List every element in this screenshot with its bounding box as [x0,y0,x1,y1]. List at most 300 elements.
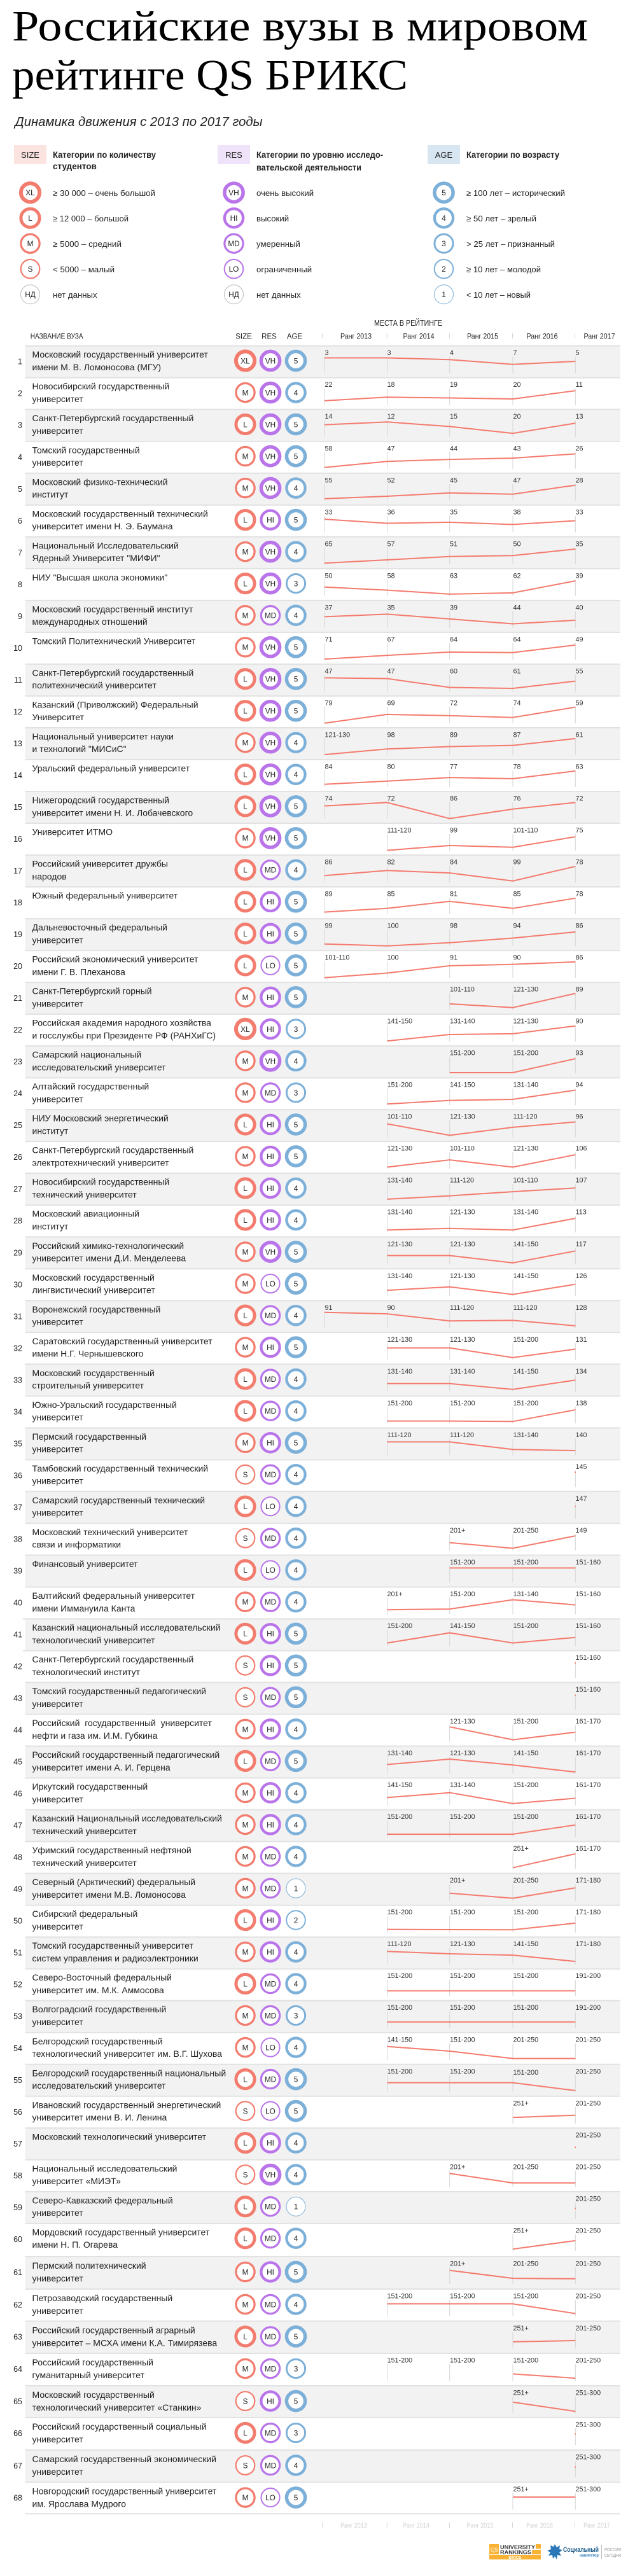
rank line: 84 [450,859,457,867]
rank line: 131-140 [513,1082,538,1089]
rank line: 99 [450,827,457,835]
name: электротехнический университет [32,1157,169,1167]
name [32,1145,193,1168]
rank line: 106 [575,1145,587,1153]
rank line: 72 [450,699,457,707]
logo: QS University Rankings BRICS: BRICS [508,2556,522,2560]
badges: XL [241,1025,250,1034]
rank line: 96 [575,1113,583,1121]
name: Балтийский федеральный университет [32,1591,195,1601]
badges [236,1911,305,1930]
legend: size: ≥ 12 000 – большой [53,214,129,223]
badges: MD [265,1884,276,1893]
rank line: 251+ [513,2227,529,2234]
logo: QS University Rankings BRICS: QS [491,2547,498,2553]
row 21: 21 [13,994,22,1003]
rank line: 145 [575,1463,587,1471]
row 63: 63 [13,2332,22,2341]
row 64: 64 [13,2365,22,2374]
badges [236,702,305,720]
badges: 5 [294,2397,298,2405]
legend: research [218,145,383,304]
name [32,1177,169,1200]
row 29: 29 [13,1248,22,1257]
badges: 3 [294,2364,298,2373]
badges: 4 [294,1216,298,1225]
badges: HI [267,1216,274,1225]
badges: HI [267,2267,274,2276]
badges: 5 [294,898,298,907]
name [32,1909,137,1932]
rank line: 151-200 [513,1909,538,1916]
rank line: 69 [387,699,395,707]
rank line: 58 [387,572,395,580]
rank line [450,1718,601,1742]
rank line [387,1209,587,1232]
rank line [450,2260,601,2284]
row 30: 30 [13,1280,22,1289]
rank line: 151-160 [575,1622,601,1630]
badges: L [243,515,248,524]
badges: S [243,1661,248,1670]
badges [236,1847,305,1865]
badges: L [243,1916,248,1925]
name: Волгоградский государственный [32,2004,166,2014]
rank line: 151-200 [450,2293,475,2301]
rank line: 151-200 [513,1336,538,1344]
name: Московский авиационный [32,1209,139,1219]
rank line: 141-150 [387,2036,412,2043]
rank line [324,445,583,469]
rank line: 151-200 [450,2357,475,2364]
badges: LO [265,2043,276,2052]
badges: M [242,2043,248,2052]
row 30 [13,1268,620,1296]
badges: VH [265,675,276,684]
badges: 5 [294,2267,298,2276]
badges: S [243,2461,248,2470]
name: имени М. В. Ломоносова (МГУ) [32,362,161,372]
name: Российский государственный социальный [32,2421,207,2432]
rank line: 100 [387,922,399,930]
rank line: 47 [324,667,333,675]
rank line: 90 [387,1304,395,1312]
rank line: 107 [575,1177,587,1185]
rank line: 201-250 [575,2163,601,2171]
rank line: 151-160 [575,1591,601,1598]
badges: VH [265,1248,276,1257]
rank line: 151-200 [387,1622,412,1630]
name: исследовательский университет [32,2080,166,2091]
title [12,2,588,99]
badges: L [243,1502,248,1511]
badges: VH [265,356,276,365]
table header: Ранг 2013 [340,333,372,340]
name: и госслужбы при Президенте РФ (РАНХиГС) [32,1030,216,1040]
rank line: 140 [575,1431,587,1439]
name: университет имени В. И. Ленина [32,2112,167,2122]
badges: M [242,1820,248,1829]
name [32,1495,205,1518]
name: Воронежский государственный [32,1304,160,1314]
rank line: 131-140 [513,1591,538,1598]
name [32,1718,212,1741]
rank line: 47 [387,445,395,452]
rank line: 39 [575,572,583,580]
name: связи и информатики [32,1540,121,1550]
row 39 [13,1555,620,1587]
row 35 [13,1427,620,1459]
rank line: 201-250 [575,2293,601,2301]
row 32: 32 [13,1344,22,1353]
rank line: 251-300 [575,2486,601,2493]
legend: age: 1 [442,290,446,299]
name: университет [32,1921,83,1932]
table header: SIZE [235,333,252,340]
row 42: 42 [13,1662,22,1671]
badges: M [242,2011,248,2020]
row 50 [13,1905,620,1933]
name: и технологий "МИСиС" [32,744,127,754]
row 59: 59 [13,2203,22,2212]
row 34 [13,1395,620,1423]
legend: age: > 25 лет – признанный [466,239,555,249]
row 5 [18,473,620,505]
rank line: 86 [324,859,333,867]
row 11: 11 [14,676,22,685]
rank line: 151-200 [513,1400,538,1407]
name: Мордовский государственный университет [32,2227,210,2237]
badges: 4 [294,770,298,779]
rank line: 151-200 [513,2293,538,2301]
badges [236,1656,305,1675]
badges: S [243,1693,248,1702]
badges: L [243,929,248,938]
rank line: 101-110 [450,986,475,994]
name [32,1241,186,1264]
badges [236,2392,305,2411]
rank line: 86 [575,954,583,962]
row 18 [13,886,620,914]
name: Казанский Национальный исследовательский [32,1813,222,1823]
rank line: 111-120 [450,1431,474,1439]
rank line: 201-250 [575,2099,601,2107]
name [32,413,193,436]
badges [236,765,305,784]
rank line [324,508,583,533]
row 42 [13,1650,620,1678]
name: Московский государственный [32,1368,155,1378]
rank line: 151-200 [450,1813,475,1821]
rank line: 171-180 [575,1909,601,1916]
row 61 [13,2256,620,2288]
rank line: 141-150 [387,1781,412,1789]
badges: M [242,1852,248,1861]
rank line: 121-130 [387,1336,412,1344]
badges [236,1592,305,1611]
badges: 5 [294,515,298,524]
badges [236,1942,305,1961]
rank line: 138 [575,1400,587,1407]
rank line: 201+ [450,2163,465,2171]
name: Белгородский государственный национальный [32,2068,226,2078]
name: университет [32,394,83,404]
rank line: 161-170 [575,1750,601,1757]
badges: MD [265,1598,276,1606]
badges: L [243,898,248,907]
name: Южный федеральный университет [32,891,178,901]
rank line: 151-200 [450,2068,475,2075]
rank line: 86 [450,795,457,803]
badges: 4 [294,2461,298,2470]
rank line: 87 [513,731,521,739]
rank line [387,1272,587,1296]
name [32,2357,153,2380]
badges: HI [267,1661,274,1670]
badges: HI [267,929,274,938]
row 41: 41 [13,1630,22,1639]
badges: M [242,388,248,397]
name [32,986,152,1008]
row 48: 48 [13,1853,22,1862]
row 14: 14 [13,771,22,780]
row 12: 12 [13,707,22,716]
badges: 4 [294,1566,298,1575]
name [32,2421,207,2444]
row 66: 66 [13,2429,22,2438]
row 14 [13,759,620,787]
rank line [575,1463,587,1487]
rank line: 141-150 [450,1622,475,1630]
row 40 [13,1587,620,1615]
name: Московский технологический университет [32,2131,207,2141]
row 7: 7 [18,548,22,557]
name [32,2036,222,2059]
badges: L [243,707,248,716]
row 21 [13,982,620,1013]
logo: Россия сегодня [602,2545,621,2559]
badges: 5 [294,707,298,716]
name [32,508,208,531]
row 58 [13,2159,620,2187]
row 46: 46 [13,1790,22,1799]
badges: M [242,2267,248,2276]
badges: 4 [294,388,298,397]
rank line: 128 [575,1304,587,1312]
badges: M [242,1089,248,1097]
rank line: 191-200 [575,2004,601,2012]
name [32,1813,222,1836]
row 15 [13,791,620,823]
name: НИУ Московский энергетический [32,1113,169,1124]
row 16 [13,823,620,851]
badges: HI [267,1788,274,1797]
rank line: 101-110 [450,1145,475,1153]
rank line: 35 [575,540,583,548]
name [32,381,169,404]
name: университет [32,2017,83,2027]
row 35: 35 [13,1439,22,1448]
badges: 5 [294,1661,298,1670]
badges: M [242,1725,248,1734]
name: Национальный университет науки [32,731,174,741]
rank line: 141-150 [450,1082,475,1089]
name: Московский государственный институт [32,604,193,614]
badges: MD [265,1693,276,1702]
badges [236,2262,305,2281]
badges: M [242,611,248,620]
rank line: 111-120 [387,1431,412,1439]
name: Иркутский государственный [32,1781,148,1792]
row 29 [13,1236,620,1268]
row 68: 68 [13,2494,22,2503]
rank line: 121-130 [387,1145,412,1153]
badges [236,2327,305,2346]
badges [236,1688,305,1707]
rank line: 131-140 [387,1272,412,1280]
badges: HI [267,1725,274,1734]
rank line: 111-120 [513,1304,538,1312]
name [32,1750,220,1772]
rank line: 35 [450,508,457,516]
badges: 5 [294,1438,298,1447]
badges: 4 [294,2171,298,2180]
badges: MD [265,2332,276,2341]
rank line: 151-200 [387,1909,412,1916]
name [32,1972,172,1995]
row 38 [13,1522,620,1550]
badges: L [243,675,248,684]
legend: research: RES [225,150,242,160]
name: университет [32,998,83,1008]
rank line: 131-140 [387,1368,412,1375]
name [32,1845,192,1868]
row 10 [13,632,620,660]
rank line: 47 [513,477,521,484]
name: технологический институт [32,1667,141,1677]
name: Российский государственный университет [32,1718,212,1728]
badges: L [243,770,248,779]
badges: S [243,2397,248,2405]
badges [236,1370,305,1388]
legend: age: ≥ 10 лет – молодой [466,265,541,274]
badges: 4 [294,866,298,875]
badges [236,1433,305,1452]
name: университет [32,1412,83,1423]
badges: HI [267,1438,274,1447]
rank line: 151-200 [387,2357,412,2364]
row 26 [13,1141,620,1169]
rank line [575,2421,601,2445]
row 52: 52 [13,1981,22,1989]
name: Пермский политехнический [32,2260,146,2271]
rank line [513,2227,601,2251]
rank line: 201-250 [575,2325,601,2332]
rank line [387,1591,601,1615]
rank line: 121-130 [387,1241,412,1248]
rank line [575,2131,601,2147]
rank line: 26 [575,445,583,452]
rank line: 89 [575,986,583,994]
badges: M [242,1598,248,1606]
rank line: 201+ [450,2260,465,2267]
badges: L [243,1629,248,1638]
badges [236,383,305,402]
legend: size [14,145,156,304]
rank line [387,1622,601,1647]
row 7 [18,536,620,568]
rank line: 201-250 [575,2227,601,2234]
name: университет [32,1794,83,1804]
name: технологический университет им. В.Г. Шухова [32,2049,222,2059]
rank line: 151-160 [575,1654,601,1662]
name [32,1018,216,1040]
row 46 [13,1778,620,1806]
rank line: 74 [324,795,333,803]
badges: 4 [294,1820,298,1829]
rank line: 90 [575,1018,583,1026]
rank line: 44 [450,445,457,452]
name: Национальный исследовательский [32,2163,177,2173]
badges: VH [265,802,276,811]
badges: 4 [294,2300,298,2309]
name: Университет ИТМО [32,827,113,837]
name: университет имени М.В. Ломоносова [32,1890,186,1900]
name: Тамбовский государственный технический [32,1463,208,1473]
name: Российская академия народного хозяйства [32,1018,211,1028]
legend: size: нет данных [53,290,97,300]
rank line: 61 [575,731,583,739]
row 20 [13,950,620,978]
badges [236,447,305,466]
badges: MD [265,2428,276,2437]
badges: 1 [294,1884,298,1893]
rank line [324,891,583,914]
name: Казанский национальный исследовательский [32,1622,220,1633]
badges: L [243,1184,248,1193]
name [32,1082,149,1104]
legend: research: Категории по уровню исследо- [256,150,383,160]
badges: M [242,1152,248,1161]
rank line: 121-130 [324,731,350,739]
legend: age: ≥ 100 лет – исторический [466,188,565,198]
rank line: 43 [513,445,521,452]
rank line [324,540,583,564]
name: университет имени Д.И. Менделеева [32,1253,186,1264]
name: Российский университет дружбы [32,859,168,869]
logo: QS University Rankings BRICS [489,2544,541,2560]
rank line [513,2390,601,2413]
badges: VH [265,452,276,461]
row 31: 31 [13,1312,22,1321]
rank line: 19 [450,381,457,389]
badges: HI [267,2397,274,2405]
logo: Социальный навигатор [547,2544,599,2559]
rank line: 72 [387,795,395,803]
logo: QS University Rankings BRICS: UNIVERSITY [500,2545,536,2550]
badges: 3 [294,1089,298,1097]
row 23 [13,1045,620,1077]
badges: L [243,2139,248,2148]
name: Томский Политехнический Университет [32,636,196,646]
name [32,2004,166,2027]
row 63 [13,2321,620,2353]
table header: МЕСТА В РЕЙТИНГЕ [374,318,442,328]
badges: S [243,2171,248,2180]
rank line: 22 [324,381,333,389]
table header: Ранг 2015 [467,333,498,340]
badges: L [243,2075,248,2084]
